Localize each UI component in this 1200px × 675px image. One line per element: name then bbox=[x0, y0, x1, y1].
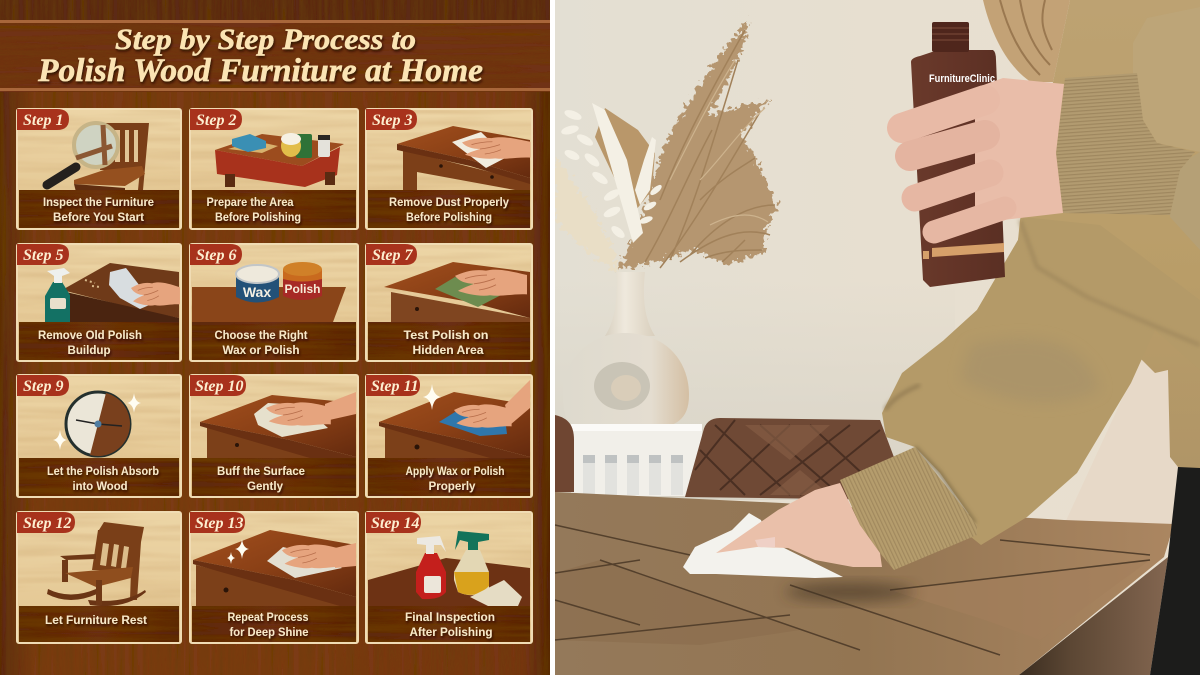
caption: Hidden Area bbox=[412, 343, 484, 357]
step badge bbox=[17, 512, 75, 533]
caption: Test Polish on bbox=[404, 328, 488, 342]
icon: table bbox=[193, 530, 356, 606]
upper sleeve cuff bbox=[1056, 73, 1195, 215]
caption bbox=[214, 328, 308, 357]
white polishing cloth bbox=[683, 513, 843, 578]
caption: Inspect the Furniture bbox=[43, 195, 154, 209]
caption bbox=[389, 195, 509, 224]
lower sleeve cuff bbox=[840, 447, 977, 570]
caption bbox=[406, 464, 504, 493]
card: step 11 bbox=[366, 375, 532, 497]
icon: folded towel bbox=[470, 580, 522, 607]
caption bbox=[38, 328, 142, 357]
caption: Before Polishing bbox=[406, 210, 492, 224]
icon: hand bbox=[131, 282, 180, 306]
step badge: Step 5 bbox=[23, 247, 63, 264]
card: step 10 bbox=[190, 375, 358, 497]
caption bbox=[228, 610, 309, 639]
step badge: Step 14 bbox=[371, 515, 419, 532]
icon: sparkle bbox=[235, 539, 249, 559]
quilted leather chair bbox=[685, 418, 910, 500]
card: step 2 bbox=[190, 109, 358, 229]
panel: wood infographic bbox=[0, 0, 550, 675]
card: step 3 bbox=[366, 109, 532, 229]
caption bbox=[206, 195, 301, 224]
step badge: Step 13 bbox=[195, 515, 243, 532]
step badge bbox=[17, 375, 69, 396]
step badge bbox=[366, 109, 417, 130]
step badge bbox=[190, 244, 242, 265]
step badge: Step 7 bbox=[372, 247, 413, 264]
caption: Choose the Right bbox=[214, 328, 308, 342]
caption bbox=[405, 610, 495, 639]
caption: Let Furniture Rest bbox=[45, 613, 147, 627]
caption bbox=[47, 464, 159, 493]
icon: hand bbox=[462, 137, 530, 159]
step badge bbox=[17, 244, 69, 265]
card: step 5 bbox=[17, 244, 181, 361]
icon: green cloth bbox=[435, 277, 505, 307]
pampas grass arrangement bbox=[555, 20, 777, 272]
heading bbox=[37, 23, 483, 89]
step badge: Step 3 bbox=[372, 112, 412, 129]
icon: magnifying glass bbox=[47, 123, 118, 185]
card: step 14 bbox=[366, 512, 532, 643]
caption: Let the Polish Absorb bbox=[47, 464, 159, 478]
icon: hand and arm bbox=[454, 380, 530, 428]
caption: Before You Start bbox=[53, 210, 144, 224]
hand holding bottle bbox=[902, 78, 1064, 232]
tan palm leaf bbox=[595, 108, 655, 215]
white dried leaves bbox=[560, 103, 663, 243]
caption: After Polishing bbox=[410, 625, 492, 639]
icon: sparkle bbox=[227, 552, 235, 564]
icon: table with old polish bbox=[62, 263, 179, 322]
caption: Buff the Surface bbox=[217, 464, 305, 478]
caption bbox=[217, 464, 305, 493]
icon: dusty cloth bbox=[109, 268, 154, 309]
icon: rocking chair bbox=[47, 522, 146, 606]
icon: wooden chair bbox=[74, 123, 149, 192]
step badge: Step 11 bbox=[371, 378, 419, 395]
caption: Buildup bbox=[68, 343, 110, 357]
icon: wax tin bbox=[236, 265, 279, 302]
card: step 12 bbox=[17, 512, 181, 643]
icon: blue sponge bbox=[228, 134, 278, 153]
hair bbox=[983, 0, 1070, 82]
caption: Prepare the Area bbox=[206, 195, 294, 209]
icon: cloth bbox=[267, 547, 342, 578]
icon: table bbox=[384, 262, 530, 322]
caption: Remove Old Polish bbox=[38, 328, 142, 342]
step badge: Step 1 bbox=[23, 112, 63, 129]
heading: Polish Wood Furniture at Home bbox=[37, 53, 483, 89]
card: step 9 bbox=[17, 375, 181, 497]
step badge: Step 6 bbox=[196, 247, 236, 264]
pampas plumes bbox=[618, 20, 777, 270]
heading: Step by Step Process to bbox=[115, 23, 416, 56]
caption: for Deep Shine bbox=[230, 625, 309, 639]
caption: Apply Wax or Polish bbox=[406, 464, 504, 478]
icon: polish tin bbox=[283, 262, 322, 300]
icon: table bbox=[379, 392, 530, 458]
card: step 13 bbox=[190, 512, 358, 643]
step badge: Step 2 bbox=[196, 112, 236, 129]
icon: wax tin: Wax bbox=[243, 284, 271, 300]
cream feather plume bbox=[555, 157, 618, 272]
polish bottle: FurnitureClinic bbox=[929, 73, 995, 85]
icon: oil spray bottle bbox=[454, 531, 489, 595]
step badge bbox=[190, 109, 242, 130]
icon: red spray bottle bbox=[416, 536, 446, 599]
caption: Before Polishing bbox=[215, 210, 301, 224]
caption: Repeat Process bbox=[228, 610, 309, 624]
icon: sparkle bbox=[127, 393, 141, 413]
radiator bbox=[571, 424, 702, 496]
card: step 1 bbox=[17, 109, 181, 229]
ceramic vase bbox=[563, 272, 689, 428]
wood table bbox=[555, 492, 1174, 675]
icon: hand and arm bbox=[282, 543, 356, 568]
caption bbox=[43, 195, 154, 224]
caption: into Wood bbox=[72, 479, 128, 493]
icon: table top bbox=[192, 287, 346, 322]
icon: table bbox=[200, 395, 356, 458]
card: step 6 bbox=[190, 244, 358, 361]
polish bottle bbox=[911, 22, 1005, 287]
caption: Remove Dust Properly bbox=[389, 195, 509, 209]
icon: table bbox=[397, 126, 530, 190]
step badge bbox=[17, 109, 69, 130]
divider gap bbox=[550, 0, 555, 675]
icon: hand and arm bbox=[266, 392, 356, 426]
hand wiping table bbox=[716, 483, 882, 567]
icon: table with red cloth bbox=[215, 134, 344, 187]
black trousers bbox=[1150, 467, 1200, 675]
panel: photo of person polishing a table bbox=[555, 0, 1200, 675]
step badge: Step 9 bbox=[23, 378, 63, 395]
caption: Gently bbox=[247, 479, 283, 493]
icon: polish jars bbox=[281, 133, 330, 158]
icon: polish tin: Polish bbox=[284, 282, 321, 296]
icon: cloth bbox=[254, 403, 328, 437]
card: step 7 bbox=[366, 244, 532, 361]
caption: Wax or Polish bbox=[222, 343, 300, 357]
icon: green spray bottle bbox=[45, 268, 70, 322]
icon: hand bbox=[455, 270, 527, 296]
caption: Properly bbox=[428, 479, 476, 493]
icon: table top bbox=[368, 558, 530, 606]
sweatshirt body and sleeve bbox=[882, 0, 1200, 545]
step badge: Step 12 bbox=[23, 515, 71, 532]
icon: dusting cloth bbox=[452, 132, 507, 168]
icon: sparkle bbox=[423, 384, 441, 410]
icon: sparkle bbox=[53, 430, 67, 450]
step badge bbox=[366, 244, 417, 265]
caption: Final Inspection bbox=[405, 610, 495, 624]
step badge: Step 10 bbox=[195, 378, 243, 395]
icon: blue cloth bbox=[439, 412, 507, 436]
caption bbox=[404, 328, 488, 357]
title banner bbox=[0, 20, 550, 92]
icon: half-wood clock bbox=[66, 392, 130, 456]
left chair bbox=[555, 415, 574, 492]
